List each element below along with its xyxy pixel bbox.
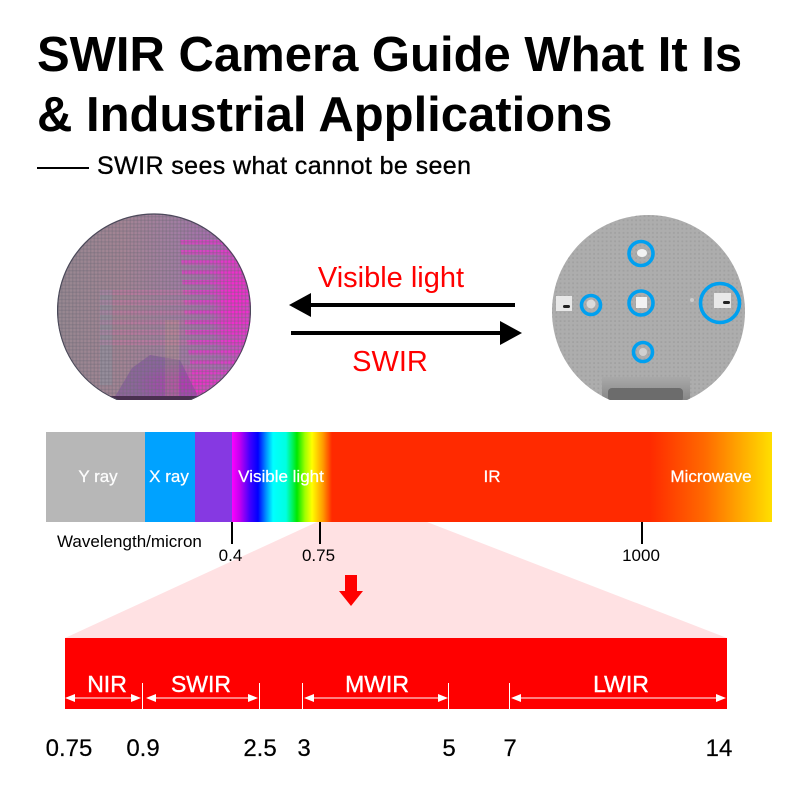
- defect markers: [582, 242, 740, 362]
- band boundary values: 0.75: [46, 735, 92, 762]
- infrared segment: [332, 432, 650, 522]
- band labels: Y ray: [78, 467, 118, 486]
- band boundary values: 7: [503, 735, 517, 762]
- band boundary values: 14: [706, 735, 732, 762]
- title: & Industrial Applications: [37, 88, 612, 142]
- band labels: X ray: [149, 467, 189, 486]
- wavelength axis: 0.4: [219, 546, 242, 565]
- LWIR span: LWIR: [593, 671, 649, 697]
- wavelength axis: 0.75: [302, 546, 335, 565]
- ultraviolet segment: [195, 432, 232, 522]
- band labels: Visible light: [238, 467, 324, 486]
- band boundary values: [46, 735, 732, 762]
- microwave segment: [650, 432, 772, 522]
- electromagnetic spectrum bar: [46, 432, 772, 522]
- infrared band breakdown: [65, 638, 727, 709]
- band labels: [78, 467, 752, 486]
- x ray segment: [145, 432, 195, 522]
- wavelength axis: Wavelength/micron: [57, 532, 202, 551]
- NIR span: NIR: [87, 671, 127, 697]
- band labels: IR: [484, 467, 500, 486]
- band boundary values: 5: [442, 735, 456, 762]
- band boundary values: 0.9: [126, 735, 160, 762]
- wavelength axis: 1000: [622, 546, 660, 565]
- visible light arrow and label: [289, 262, 515, 317]
- visible spectrum segment: [232, 432, 332, 522]
- band boundary values: 3: [297, 735, 311, 762]
- subtitle: SWIR sees what cannot be seen: [97, 152, 471, 180]
- SWIR arrow and label: SWIR: [352, 346, 428, 378]
- title: [37, 28, 742, 142]
- magenta die rows: [180, 235, 255, 395]
- wafer under visible light: [57, 213, 251, 400]
- LWIR span: [511, 671, 726, 702]
- SWIR arrow and label: [291, 321, 522, 378]
- wafer under SWIR with defects: [552, 215, 745, 400]
- gamma ray segment: [46, 432, 145, 522]
- red down arrow: [339, 575, 363, 606]
- MWIR span: MWIR: [345, 671, 409, 697]
- wavelength axis: [57, 522, 660, 565]
- MWIR span: [304, 671, 448, 702]
- zoom projection: [65, 522, 727, 638]
- title: SWIR Camera Guide What It Is: [37, 28, 742, 82]
- visible light arrow and label: Visible light: [318, 262, 464, 294]
- band boundary values: 2.5: [243, 735, 277, 762]
- band labels: Microwave: [670, 467, 752, 486]
- SWIR span: SWIR: [171, 671, 231, 697]
- NIR span: [65, 671, 141, 702]
- SWIR span: [146, 671, 258, 702]
